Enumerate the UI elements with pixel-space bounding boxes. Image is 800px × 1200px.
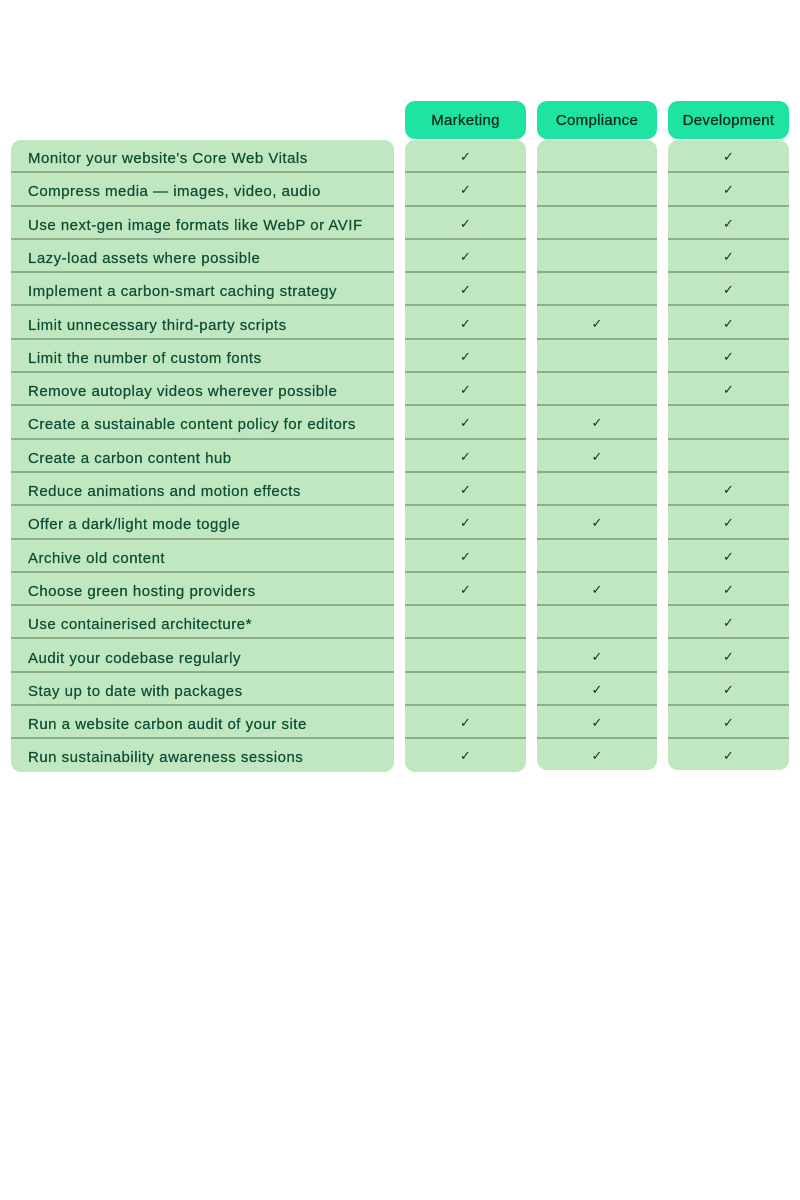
panel: actions list: Remove autoplay videos wherever possible (28, 383, 337, 400)
panel: Development column: ✓ (723, 216, 734, 231)
panel: Marketing column: ✓ (460, 515, 471, 530)
panel: Marketing column: ✓ (460, 415, 471, 430)
panel: actions list: Stay up to date with packages (28, 683, 243, 700)
panel: Compliance column (537, 140, 657, 770)
panel: actions list: Lazy-load assets where possible (28, 250, 260, 267)
panel: actions list: Limit the number of custom fonts (28, 350, 262, 367)
panel: Marketing column: ✓ (460, 482, 471, 497)
panel: Compliance column: ✓ (592, 682, 602, 697)
panel: Development column: ✓ (723, 482, 734, 497)
panel: Development column: ✓ (723, 182, 734, 197)
panel: Development column: ✓ (723, 748, 734, 763)
panel: Development column (668, 140, 789, 770)
panel: Marketing column: ✓ (460, 382, 471, 397)
panel: Marketing column: ✓ (460, 549, 471, 564)
header: Development: Development (683, 112, 774, 128)
panel: actions list: Use next-gen image formats like WebP or AVIF (28, 217, 363, 234)
panel: Marketing column: ✓ (460, 748, 471, 763)
panel: Marketing column: ✓ (460, 349, 471, 364)
panel: actions list: Run sustainability awareness sessions (28, 749, 303, 766)
panel: Development column: ✓ (723, 282, 734, 297)
panel: actions list: Offer a dark/light mode toggle (28, 516, 240, 533)
panel: Development column: ✓ (723, 249, 734, 264)
panel: Development column: ✓ (723, 382, 734, 397)
panel: Development column: ✓ (723, 648, 734, 664)
panel: Compliance column: ✓ (592, 449, 602, 464)
panel: Development column: ✓ (723, 715, 734, 730)
panel: actions list (11, 140, 394, 772)
panel: Development column: ✓ (723, 682, 734, 697)
panel: Marketing column: ✓ (460, 282, 471, 297)
header: Marketing: Marketing (431, 112, 500, 128)
panel: Development column: ✓ (723, 615, 734, 630)
header: Marketing (405, 101, 526, 139)
panel: Compliance column: ✓ (592, 582, 602, 597)
panel: Marketing column (405, 140, 526, 772)
header: Compliance (537, 101, 657, 139)
panel: Marketing column: ✓ (460, 216, 471, 231)
panel: actions list: Create a carbon content hub (28, 450, 232, 467)
panel: Marketing column: ✓ (460, 582, 471, 597)
panel: Compliance column: ✓ (592, 715, 602, 730)
panel: Compliance column: ✓ (592, 515, 602, 530)
panel: actions list: Implement a carbon-smart caching strategy (28, 283, 337, 300)
panel: actions list: Audit your codebase regularly (28, 650, 241, 666)
panel: Development column: ✓ (723, 515, 734, 530)
panel: Marketing column: ✓ (460, 149, 471, 164)
panel: actions list: Create a sustainable content policy for editors (28, 416, 356, 433)
header: Compliance: Compliance (556, 112, 638, 128)
panel: actions list: Use containerised architecture* (28, 616, 252, 633)
panel: Marketing column: ✓ (460, 449, 471, 464)
header: Development (668, 101, 789, 139)
panel: Compliance column: ✓ (592, 415, 602, 430)
panel: Development column: ✓ (723, 582, 734, 597)
panel: Compliance column: ✓ (592, 748, 602, 763)
panel: Development column: ✓ (723, 349, 734, 364)
panel: Compliance column: ✓ (592, 316, 602, 330)
panel: Marketing column: ✓ (460, 316, 471, 330)
panel: Marketing column: ✓ (460, 182, 471, 197)
panel: actions list: Limit unnecessary third-party scripts (28, 316, 287, 334)
panel: Development column: ✓ (723, 149, 734, 164)
panel: Development column: ✓ (723, 316, 734, 330)
panel: actions list: Archive old content (28, 550, 165, 567)
panel: actions list: Monitor your website's Core Web Vitals (28, 150, 308, 167)
panel: Development column: ✓ (723, 549, 734, 564)
panel: Marketing column: ✓ (460, 715, 471, 730)
panel: actions list: Compress media — images, video, audio (28, 183, 321, 200)
panel: actions list: Reduce animations and motion effects (28, 483, 301, 500)
panel: Marketing column: ✓ (460, 249, 471, 264)
panel: actions list: Choose green hosting providers (28, 583, 256, 600)
panel: actions list: Run a website carbon audit of your site (28, 716, 307, 733)
panel: Compliance column: ✓ (592, 648, 602, 664)
